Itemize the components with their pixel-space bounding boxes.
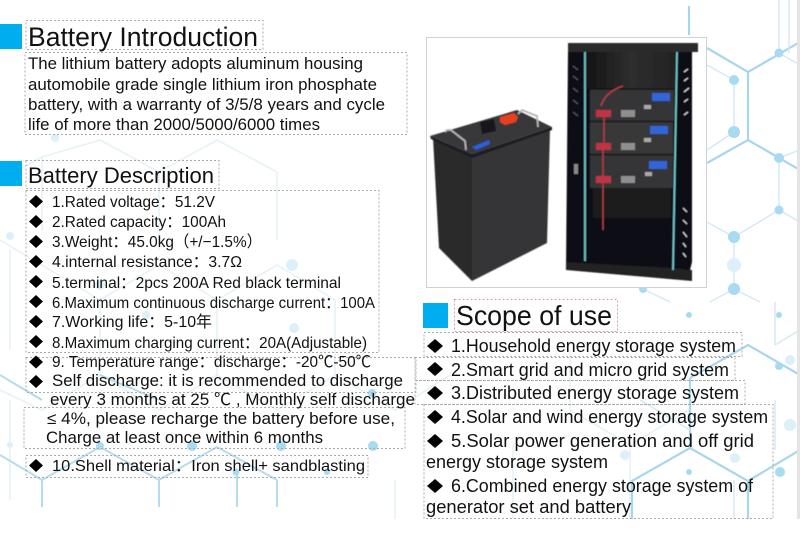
list: battery specifications: 7.Working life：5-10年 (52, 313, 212, 331)
list: battery specifications: 3.Weight：45.0kg（+/−1.5%） (52, 233, 262, 251)
text block: introduction paragraph (25, 52, 407, 134)
heading: Battery Introduction: Battery Introduction (28, 22, 258, 52)
list: battery specifications: 10.Shell material：Iron shell+ sandblasting (52, 458, 365, 475)
list: battery specifications (24, 190, 416, 478)
product photo panel (426, 38, 706, 288)
list: battery specifications: ≤ 4%, please recharge the battery before use, (47, 410, 395, 428)
text block: introduction paragraph: The lithium battery adopts aluminum housing (28, 54, 363, 73)
list: scope of use items: 2.Smart grid and micro grid system (451, 359, 729, 380)
list: scope of use items: 6.Combined energy storage system of (451, 475, 754, 496)
list: scope of use items: 4.Solar and wind energy storage system (451, 406, 768, 427)
list: battery specifications: 6.Maximum continuous discharge current：100A (52, 295, 375, 312)
list: scope of use items (415, 332, 773, 518)
list: battery specifications: 8.Maximum charging current：20A(Adjustable) (52, 335, 367, 352)
list: battery specifications: 5.terminal：2pcs 200A Red black terminal (52, 275, 341, 292)
icon: rack cabinet with three batteries (566, 43, 698, 281)
blue marker: battery description (0, 161, 22, 186)
list: scope of use items: 3.Distributed energy storage system (451, 382, 739, 403)
list: scope of use items: energy storage system (426, 451, 608, 472)
text block: introduction paragraph: battery, with a warranty of 3/5/8 years and cycle (28, 95, 385, 114)
blue marker: scope of use (423, 303, 448, 328)
list: battery specifications: Charge at least once within 6 months (46, 429, 323, 447)
heading: Battery Description: Battery Description (28, 163, 214, 188)
icon: standalone battery module (430, 110, 552, 281)
list: battery specifications: 2.Rated capacity：100Ah (52, 214, 226, 231)
list: battery specifications: Self discharge: it is recommended to discharge (52, 372, 403, 390)
list: scope of use items: generator set and battery (426, 496, 632, 517)
text block: introduction paragraph: life of more than 2000/5000/6000 times (28, 115, 320, 134)
list: battery specifications: 9. Temperature range：discharge：-20℃-50℃ (52, 354, 371, 371)
list: battery specifications: 1.Rated voltage：51.2V (52, 194, 215, 211)
list: scope of use items: 5.Solar power generation and off grid (451, 430, 754, 451)
list: battery specifications: 4.internal resistance：3.7Ω (52, 254, 242, 271)
text block: introduction paragraph: automobile grade single lithium iron phosphate (28, 75, 377, 94)
blue marker: battery introduction (0, 24, 22, 49)
heading: Scope of use: Scope of use (456, 300, 612, 331)
list: scope of use items: 1.Household energy storage system (451, 335, 736, 356)
list: battery specifications: every 3 months at 25 ℃ , Monthly self discharge (50, 391, 415, 409)
